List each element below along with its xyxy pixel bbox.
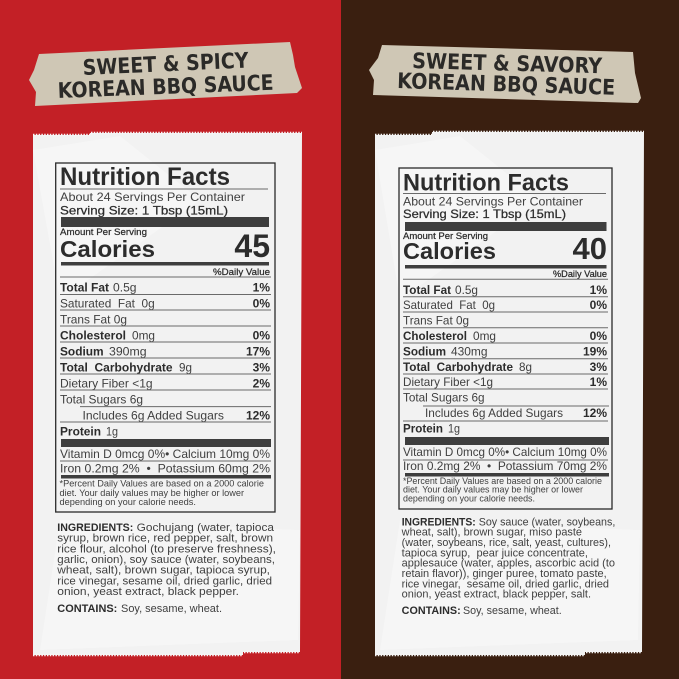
calories xyxy=(60,228,270,264)
nutrient rows: Total Fat xyxy=(403,283,451,297)
nutrient rows xyxy=(403,283,609,436)
nutrient rows: Total Carbohydrate xyxy=(403,360,513,374)
nutrition facts label xyxy=(56,163,275,512)
contains text xyxy=(57,603,222,615)
serving size: Serving Size: 1 Tbsp (15mL) xyxy=(60,203,228,217)
servings per container: About 24 Servings Per Container xyxy=(60,190,245,204)
nutrient rows: 0.5g xyxy=(113,281,136,295)
nutrient rows: 19% xyxy=(583,345,607,359)
amount per serving: Amount Per Serving xyxy=(60,227,147,237)
nutrient rows: Trans Fat 0g xyxy=(403,314,469,328)
calories: 40 xyxy=(573,231,607,266)
nutrient rows: Total Sugars 6g xyxy=(60,392,143,406)
vitamins and minerals: Vitamin D 0mcg 0%• Calcium 10mg 0% xyxy=(403,445,607,459)
ingredients text: tapioca syrup, pear juice concentrate, xyxy=(402,547,588,559)
nutrient rows: 0% xyxy=(253,328,270,342)
nutrient rows: 0.5g xyxy=(455,283,478,297)
ingredients text: Soy sauce (water, soybeans, xyxy=(479,516,615,528)
nutrient rows: 0% xyxy=(253,297,270,311)
nutrient rows: Sodium xyxy=(60,344,104,358)
footnote: diet. Your daily values may be higher or lower xyxy=(60,488,244,498)
nutrient rows: 12% xyxy=(246,408,270,422)
ingredients text: retain flavor)), ginger puree, tomato paste, xyxy=(402,568,607,580)
vitamins and minerals: Iron 0.2mg 2% • Potassium 60mg 2% xyxy=(60,462,270,476)
nutrient rows: Total Fat xyxy=(60,281,109,295)
nutrient rows: Trans Fat 0g xyxy=(60,312,127,326)
label title: Nutrition Facts xyxy=(403,170,569,197)
ingredients text: onion, yeast extract, black pepper, salt. xyxy=(402,589,591,601)
nutrient rows: 12% xyxy=(583,406,607,420)
packet: white sachet xyxy=(33,133,302,655)
contains text xyxy=(402,605,562,617)
daily value header: %Daily Value xyxy=(213,267,270,278)
footnote xyxy=(60,479,264,507)
nutrient rows: 0% xyxy=(590,329,607,343)
ingredients text: (water, soybeans, rice, salt, yeast, cultures), xyxy=(402,537,611,549)
ingredients text xyxy=(56,522,276,598)
nutrient rows: Includes 6g Added Sugars xyxy=(425,406,563,420)
contains text: CONTAINS: xyxy=(402,605,461,617)
nutrient rows: 0mg xyxy=(132,328,155,342)
heading: tape label sweet and savory xyxy=(369,45,641,103)
nutrient rows: Protein xyxy=(403,422,443,436)
nutrient rows: Dietary Fiber <1g xyxy=(60,376,153,390)
contains text: Soy, sesame, wheat. xyxy=(463,605,562,617)
heading: tape label sweet and savory: KOREAN BBQ SAUCE xyxy=(397,69,615,101)
ingredients text: applesauce (water, apples, ascorbic acid (to xyxy=(402,558,615,570)
footnote: *Percent Daily Values are based on a 2000 calorie xyxy=(403,476,602,486)
calories: Calories xyxy=(403,238,496,264)
nutrition facts label xyxy=(399,168,612,509)
nutrient rows xyxy=(60,281,271,438)
panel: sweet and savory sauce xyxy=(369,45,644,655)
calories: 45 xyxy=(234,228,270,264)
ingredients text: rice flour, alcohol (to preserve freshness), xyxy=(57,543,276,555)
nutrient rows: 0mg xyxy=(473,329,496,343)
nutrient rows: 430mg xyxy=(451,345,488,359)
nutrient rows: Total Carbohydrate xyxy=(60,360,173,374)
vitamins and minerals: Iron 0.2mg 2% • Potassium 70mg 2% xyxy=(403,459,607,473)
footnote: depending on your calorie needs. xyxy=(60,497,196,507)
nutrient rows: 1% xyxy=(590,375,607,389)
nutrient rows: 0% xyxy=(590,298,607,312)
contains text: Soy, sesame, wheat. xyxy=(121,603,222,615)
nutrient rows: 1% xyxy=(253,281,270,295)
nutrient rows: 390mg xyxy=(109,344,147,358)
ingredients text: wheat, salt), brown sugar, miso paste xyxy=(401,527,582,539)
ingredients text: rice vinegar, sesame oil, dried garlic, dried xyxy=(57,575,272,587)
nutrient rows: Includes 6g Added Sugars xyxy=(82,408,224,422)
amount per serving: Amount Per Serving xyxy=(403,231,488,241)
nutrient rows: Total Sugars 6g xyxy=(403,391,484,405)
ingredients text xyxy=(401,516,615,601)
servings per container: About 24 Servings Per Container xyxy=(403,196,583,209)
footnote: diet. Your daily values may be higher or lower xyxy=(403,485,583,495)
ingredients text: syrup, brown rice, red pepper, salt, brown xyxy=(57,533,273,545)
label title: Nutrition Facts xyxy=(60,164,230,191)
vitamins and minerals: Vitamin D 0mcg 0%• Calcium 10mg 0% xyxy=(60,447,270,461)
calories xyxy=(403,231,607,266)
nutrient rows: 8g xyxy=(519,360,532,374)
nutrient rows: 17% xyxy=(246,344,270,358)
contains text: CONTAINS: xyxy=(57,603,117,615)
nutrient rows: Cholesterol xyxy=(403,329,467,343)
heading: tape label sweet and spicy: SWEET & SPICY xyxy=(82,48,249,81)
ingredients text: INGREDIENTS: xyxy=(402,516,476,528)
ingredients text: garlic, onion), soy sauce (water, soybeans, xyxy=(57,554,275,566)
nutrient rows: Dietary Fiber <1g xyxy=(403,375,493,389)
nutrient rows: 1g xyxy=(106,424,118,438)
ingredients text: INGREDIENTS: xyxy=(57,522,133,534)
nutrient rows: 2% xyxy=(253,376,270,390)
nutrient rows: Saturated Fat 0g xyxy=(60,297,155,311)
nutrient rows: Sodium xyxy=(403,345,446,359)
serving size: Serving Size: 1 Tbsp (15mL) xyxy=(403,208,566,221)
nutrient rows: 9g xyxy=(179,360,192,374)
vitamins and minerals xyxy=(60,447,271,476)
daily value header: %Daily Value xyxy=(553,269,607,279)
packet: white sachet xyxy=(375,132,644,655)
ingredients text: rice vinegar, sesame oil, dried garlic, dried xyxy=(402,578,609,590)
nutrient rows: Saturated Fat 0g xyxy=(403,298,495,312)
heading: tape label sweet and savory: SWEET & SAVORY xyxy=(412,49,603,79)
heading: tape label sweet and spicy: KOREAN BBQ SAUCE xyxy=(57,71,274,104)
nutrient rows: Cholesterol xyxy=(60,328,126,342)
ingredients text: Gochujang (water, tapioca xyxy=(137,522,274,534)
nutrient rows: 1g xyxy=(448,422,460,436)
heading: tape label sweet and spicy xyxy=(29,42,302,106)
footnote: depending on your calorie needs. xyxy=(403,494,535,504)
vitamins and minerals xyxy=(403,445,608,473)
footnote: *Percent Daily Values are based on a 2000 calorie xyxy=(60,479,264,489)
nutrient rows: 3% xyxy=(253,360,270,374)
footnote xyxy=(403,476,602,504)
panel: sweet and spicy sauce xyxy=(29,42,302,655)
nutrient rows: Protein xyxy=(60,424,101,438)
nutrient rows: 3% xyxy=(590,360,607,374)
calories: Calories xyxy=(60,236,155,262)
ingredients text: onion, yeast extract, black pepper. xyxy=(57,586,239,598)
ingredients text: wheat, salt), brown sugar, tapioca syrup, xyxy=(56,565,270,577)
nutrient rows: 1% xyxy=(590,283,607,297)
